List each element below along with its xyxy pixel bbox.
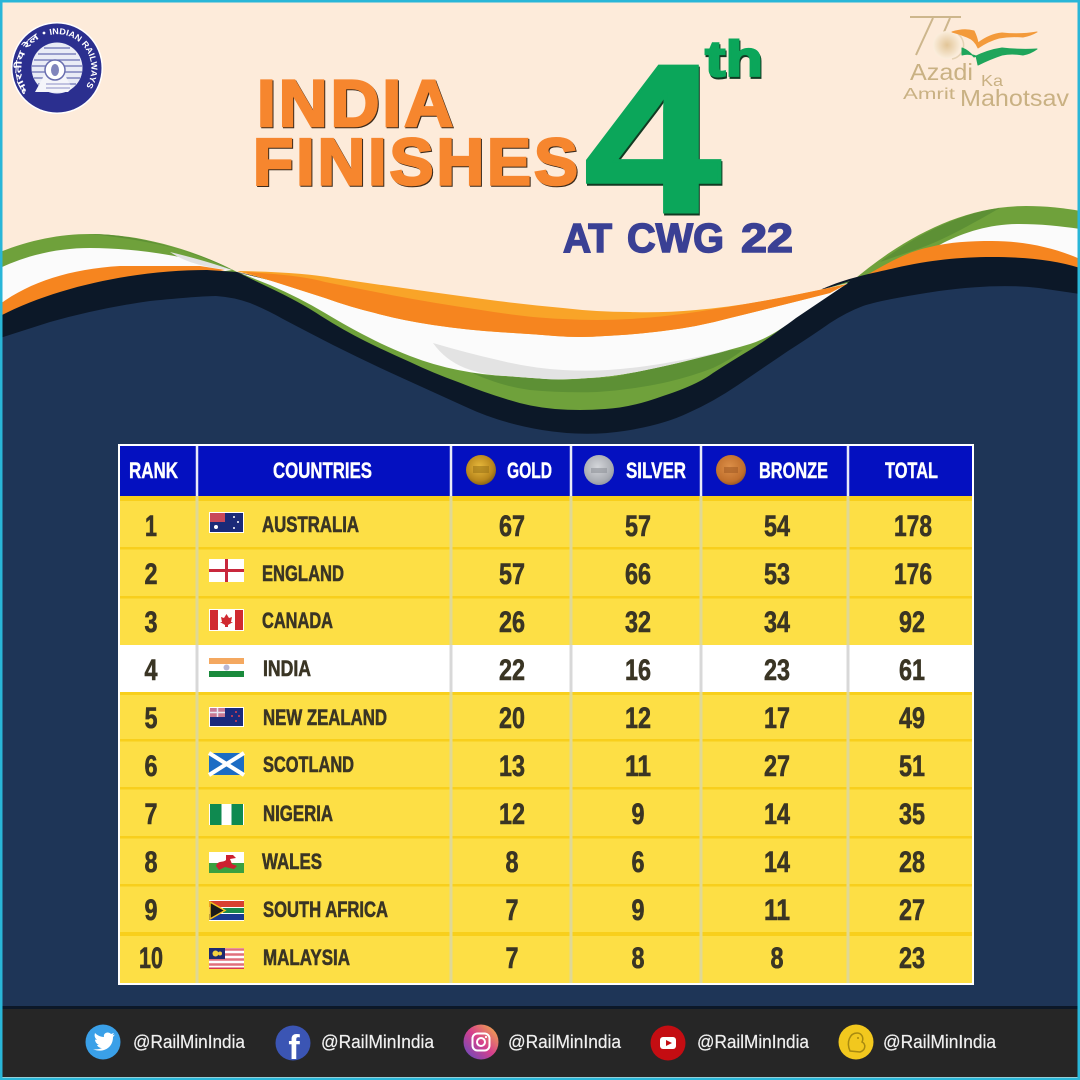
flag: South Africa	[209, 900, 244, 921]
table header	[120, 446, 972, 496]
icon: facebook: f	[288, 1029, 300, 1067]
row 10: Malaysia: MALAYSIA	[263, 945, 350, 970]
row 8: Wales: WALES	[262, 849, 322, 874]
icon: koo	[838, 1024, 874, 1060]
row 1: Australia: 57	[625, 510, 651, 543]
row 7: Nigeria: NIGERIA	[263, 801, 333, 826]
row 2: England: 176	[894, 558, 932, 591]
subtitle: at CWG 22: AT	[563, 215, 612, 261]
row 2: England: 53	[764, 558, 790, 591]
row 6: Scotland: 13	[499, 750, 525, 783]
row 8: Wales	[144, 846, 925, 879]
row 5: New Zealand: 5	[144, 702, 158, 735]
row 7: Nigeria: 35	[899, 798, 925, 831]
row 2: England: ENGLAND	[262, 561, 344, 586]
row 4: India: 23	[764, 654, 790, 687]
table header: TOTAL	[885, 458, 938, 483]
subtitle: at CWG 22: CWG	[627, 215, 724, 261]
row 9: South Africa: 7	[506, 894, 518, 927]
table header: SILVER	[626, 458, 686, 483]
logo: Azadi Ka Amrit Mahotsav: Mahotsav	[960, 85, 1070, 111]
icon: youtube	[650, 1026, 686, 1060]
row 3: Canada: 3	[144, 606, 158, 639]
footer bar: @RailMinIndia	[883, 1032, 997, 1052]
row 9: South Africa: 27	[899, 894, 925, 927]
title: big 4th: th	[705, 31, 763, 87]
row 9: South Africa: SOUTH AFRICA	[263, 897, 388, 922]
row 6: Scotland: 51	[899, 750, 925, 783]
row 6: Scotland	[144, 750, 925, 783]
row 4: India: 16	[625, 654, 651, 687]
medal table	[118, 444, 974, 985]
row 5: New Zealand: 12	[625, 702, 651, 735]
row 4: India: INDIA	[263, 656, 311, 681]
row 8: Wales: 8	[506, 846, 518, 879]
row 10: Malaysia: 8	[632, 942, 644, 975]
row 10: Malaysia: 10	[139, 942, 163, 975]
row 5: New Zealand: 17	[764, 702, 790, 735]
row 8: Wales: 8	[144, 846, 158, 879]
row 10: Malaysia: 7	[506, 942, 518, 975]
dark wave	[0, 257, 1080, 1010]
row 10: Malaysia: 23	[899, 942, 925, 975]
subtitle: at CWG 22: 22	[741, 215, 793, 261]
flag: Nigeria	[209, 804, 244, 825]
row 3: Canada: 34	[764, 606, 790, 639]
row 7: Nigeria	[144, 798, 925, 831]
row 4: India: 22	[499, 654, 525, 687]
row 3: Canada	[144, 606, 925, 639]
row 7: Nigeria: 7	[144, 798, 158, 831]
title: India finishes: FINISHES	[253, 124, 581, 198]
row 7: Nigeria: 14	[764, 798, 790, 831]
row 3: Canada: CANADA	[262, 608, 333, 633]
logo: Azadi Ka Amrit Mahotsav	[903, 17, 1070, 111]
row 1: Australia	[145, 510, 932, 543]
navy background	[0, 286, 1080, 1006]
table row backgrounds	[120, 496, 972, 983]
row 9: South Africa: 9	[632, 894, 644, 927]
row 8: Wales: 14	[764, 846, 790, 879]
row 8: Wales: 6	[632, 846, 644, 879]
flag: England	[209, 559, 244, 582]
row 1: Australia: AUSTRALIA	[262, 512, 359, 537]
row 5: New Zealand: NEW ZEALAND	[263, 705, 387, 730]
side ribbon: left tricolour	[0, 234, 237, 325]
row 5: New Zealand	[144, 702, 925, 735]
row 4: India: 61	[899, 654, 925, 687]
row 5: New Zealand: 20	[499, 702, 525, 735]
table header: COUNTRIES	[273, 458, 372, 483]
central tricolour ribbon	[237, 271, 850, 410]
flag: Malaysia	[209, 948, 244, 969]
row 3: Canada: 32	[625, 606, 651, 639]
table header: BRONZE	[759, 458, 828, 483]
logo: Indian Railways emblem	[11, 22, 103, 114]
row 9: South Africa	[144, 894, 925, 927]
row 3: Canada: 26	[499, 606, 525, 639]
row 6: Scotland: 11	[625, 750, 651, 783]
row 2: England: 66	[625, 558, 651, 591]
flag: Scotland	[209, 753, 244, 775]
title: big 4th	[584, 20, 763, 257]
logo: Azadi Ka Amrit Mahotsav: Azadi	[910, 59, 973, 85]
row 8: Wales: 28	[899, 846, 925, 879]
subtitle: at CWG 22	[563, 215, 793, 261]
title: big 4th: 4	[584, 20, 721, 257]
row 1: Australia: 178	[894, 510, 932, 543]
flag: New Zealand	[209, 707, 244, 727]
row 6: Scotland: 6	[144, 750, 158, 783]
row 2: England: 57	[499, 558, 525, 591]
row 5: New Zealand: 49	[899, 702, 925, 735]
footer bar	[0, 1006, 1080, 1077]
flag: India	[209, 658, 244, 677]
title: India finishes	[253, 66, 581, 198]
icon: facebook	[276, 1026, 310, 1067]
logo: Indian Railways emblem: INDIAN RAILWAYS	[50, 28, 98, 88]
row 9: South Africa: 11	[764, 894, 790, 927]
row 4: India	[144, 654, 925, 687]
title: India finishes: INDIA	[257, 66, 456, 140]
footer bar: @RailMinIndia	[133, 1032, 246, 1052]
row 1: Australia: 1	[145, 510, 157, 543]
footer bar: @RailMinIndia	[321, 1032, 435, 1052]
row 1: Australia: 54	[764, 510, 790, 543]
row 2: England	[144, 558, 932, 591]
row 3: Canada: 92	[899, 606, 925, 639]
icon: twitter	[86, 1024, 120, 1060]
logo: Azadi Ka Amrit Mahotsav: Amrit	[903, 86, 956, 103]
row 2: England: 2	[144, 558, 158, 591]
footer bar: @RailMinIndia	[697, 1032, 810, 1052]
icon: instagram	[464, 1024, 498, 1060]
row 6: Scotland: SCOTLAND	[263, 752, 354, 777]
side ribbon: right tricolour	[850, 206, 1080, 300]
footer bar: @RailMinIndia	[508, 1032, 622, 1052]
row 10: Malaysia	[139, 942, 925, 975]
row 6: Scotland: 27	[764, 750, 790, 783]
row 9: South Africa: 9	[144, 894, 158, 927]
table header: GOLD	[507, 458, 552, 483]
logo: Indian Railways emblem: भारतीय रेल	[14, 33, 38, 94]
row 7: Nigeria: 12	[499, 798, 525, 831]
row 7: Nigeria: 9	[632, 798, 644, 831]
flag: Australia	[209, 512, 244, 533]
table header: RANK	[129, 458, 178, 483]
flag: Canada	[209, 609, 244, 631]
row 1: Australia: 67	[499, 510, 525, 543]
row 4: India: 4	[144, 654, 158, 687]
row 10: Malaysia: 8	[770, 942, 784, 975]
logo: Azadi Ka Amrit Mahotsav: Ka	[981, 73, 1003, 90]
flag: Wales	[209, 852, 244, 873]
